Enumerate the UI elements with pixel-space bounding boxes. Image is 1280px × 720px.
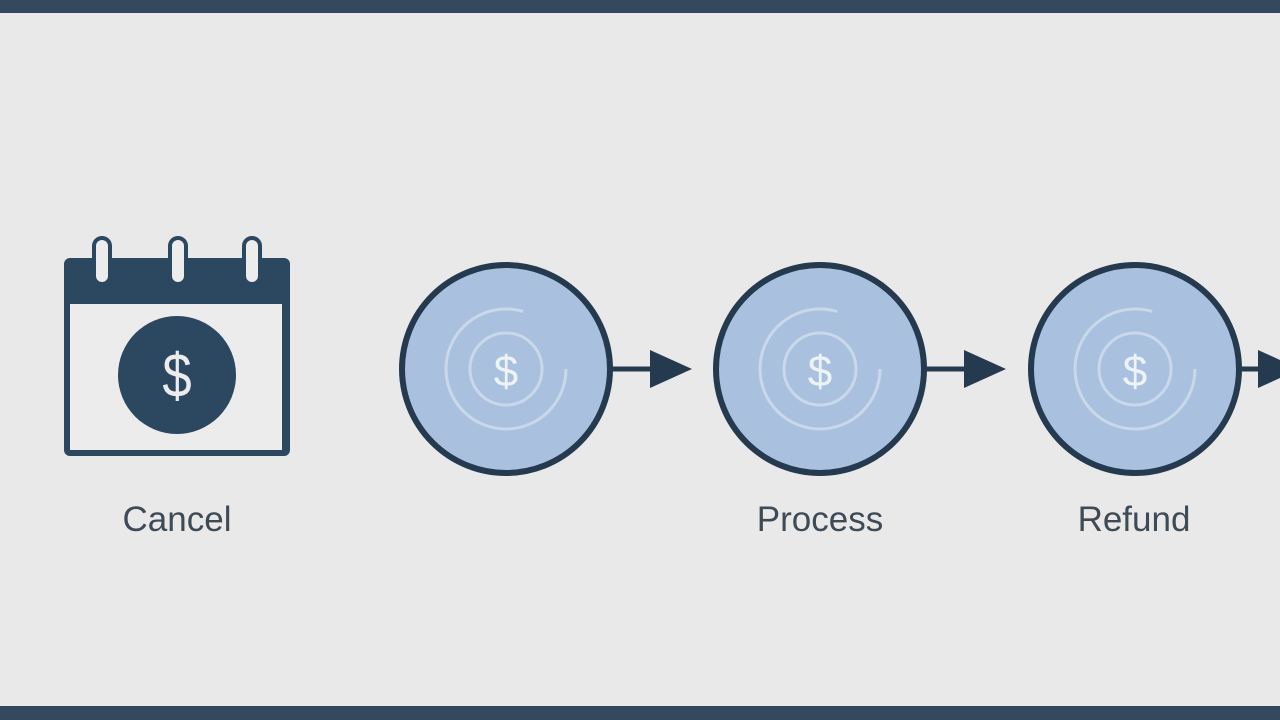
label: Process: Process — [757, 500, 883, 539]
label: Refund: Refund — [1078, 500, 1190, 539]
step circle 1 — [402, 265, 610, 473]
icon: calendar with dollar coin — [64, 238, 290, 456]
step circle 2 — [716, 265, 924, 473]
step circle 1: $ — [494, 347, 518, 396]
top bar — [0, 0, 1280, 13]
step circle 2: $ — [808, 347, 832, 396]
bottom bar — [0, 706, 1280, 720]
arrow 3 — [1239, 350, 1280, 388]
step circle 3 — [1031, 265, 1239, 473]
label: Cancel: Cancel — [123, 500, 231, 539]
icon: calendar with dollar coin: $ — [162, 342, 192, 411]
step circle 3: $ — [1123, 347, 1147, 396]
arrow 2 — [924, 350, 1006, 388]
arrow 1 — [610, 350, 692, 388]
